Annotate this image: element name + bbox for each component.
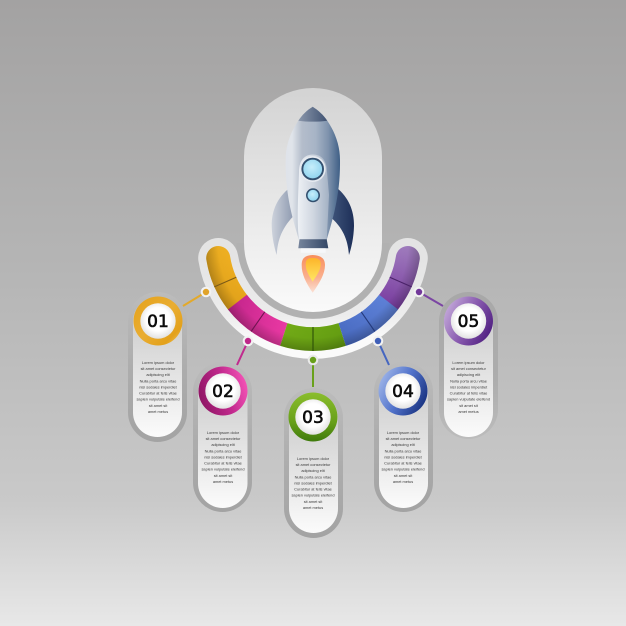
text block 01: amet metus [148, 409, 168, 414]
small window [306, 188, 320, 202]
segment purple [389, 258, 408, 302]
number 01: 01 [147, 312, 169, 332]
segment magenta [237, 302, 284, 334]
text block 01: sit amet consectetur [141, 366, 176, 371]
text block 02: amet metus [213, 479, 233, 484]
text block 03: sit amet sit [304, 499, 323, 504]
text block 03: sapien vulputate eleifend [291, 493, 335, 498]
text block 05: sit amet sit [459, 403, 479, 408]
large window [300, 156, 326, 182]
panel: step 04 [374, 362, 433, 512]
panel: step 03 [284, 388, 343, 538]
text block 01: sapien vulputate eleifend [136, 397, 180, 402]
text block 05: adipiscing elit [457, 372, 481, 377]
panel: step 02 [193, 362, 252, 512]
rocket body [286, 121, 340, 240]
text block 03: Lorem ipsum dolor [297, 456, 330, 461]
text block 05: Nulla porta arcu vitae [450, 378, 487, 383]
panel: arc backing [218, 258, 408, 339]
text block 04: sapien vulputate eleifend [381, 467, 425, 472]
text block 04: nisi sodales imperdiet [384, 454, 423, 459]
icon: rocket [272, 107, 354, 293]
connector lines [183, 292, 443, 387]
text block 05: Curabitur at felis vitae [450, 391, 487, 396]
body centre panel [298, 154, 329, 240]
number 04: 04 [392, 382, 414, 402]
rocket nose [298, 107, 327, 122]
text block 02: Nulla porta arcu vitae [205, 448, 241, 453]
text block 01: adipiscing elit [146, 372, 171, 377]
text block 02: adipiscing elit [211, 442, 236, 447]
text block 03: sit amet consectetur [296, 462, 331, 467]
number 03: 03 [302, 408, 324, 428]
left fin [272, 188, 294, 255]
text block 05: sit amet consectetur [451, 366, 487, 371]
text block 03: Nulla porta arcu vitae [295, 474, 331, 479]
segment yellow [218, 258, 237, 302]
segment blue [342, 302, 389, 334]
text block 02: Lorem ipsum dolor [207, 430, 240, 435]
text block 02: sit amet sit [214, 473, 233, 478]
text block 05: amet metus [458, 409, 479, 414]
text block 04: adipiscing elit [391, 442, 416, 447]
engine band [298, 239, 328, 248]
text block 01: sit amet sit [149, 403, 168, 408]
text block 02: sit amet consectetur [206, 436, 241, 441]
text block 04: sit amet sit [394, 473, 413, 478]
text block 03: adipiscing elit [301, 468, 326, 473]
text block 02: nisi sodales imperdiet [204, 454, 243, 459]
arc dividers [214, 277, 412, 351]
text block 02: sapien vulputate eleifend [201, 467, 245, 472]
text block 03: Curabitur at felis vitae [294, 487, 332, 492]
text block 05: sapien vulputate eleifend [447, 397, 490, 402]
nozzle [301, 248, 326, 253]
text block 02: Curabitur at felis vitae [204, 461, 242, 466]
text block 01: Lorem ipsum dolor [142, 360, 175, 365]
text block 05: nisi sodales imperdiet [450, 384, 488, 389]
text block 01: Nulla porta arcu vitae [140, 378, 176, 383]
text block 01: Curabitur at felis vitae [139, 391, 177, 396]
panel: rocket capsule [240, 88, 386, 315]
text block 01: nisi sodales imperdiet [139, 384, 178, 389]
text block 03: nisi sodales imperdiet [294, 480, 333, 485]
panel: step 05 [439, 292, 498, 439]
text block 04: amet metus [393, 479, 413, 484]
segment green [284, 334, 342, 339]
right fin [332, 188, 354, 255]
text block 05: Lorem ipsum dolor [452, 360, 485, 365]
panel: step 01 [128, 292, 187, 442]
arc shading [218, 258, 408, 339]
connector dots [201, 287, 424, 365]
text block 04: Lorem ipsum dolor [387, 430, 420, 435]
chart: colored arc segments [218, 258, 408, 339]
text block 04: Nulla porta arcu vitae [385, 448, 421, 453]
flame [302, 255, 325, 293]
text block 04: Curabitur at felis vitae [384, 461, 422, 466]
number 02: 02 [212, 382, 234, 402]
text block 04: sit amet consectetur [386, 436, 421, 441]
number 05: 05 [458, 312, 479, 332]
text block 03: amet metus [303, 505, 323, 510]
